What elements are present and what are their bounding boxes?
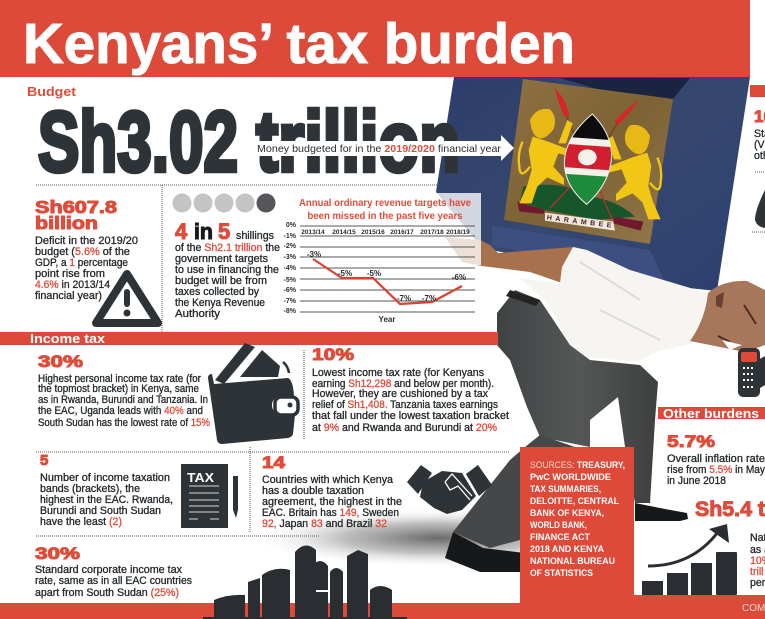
sources box: BANK OF KENYA, [530, 508, 604, 519]
shillings text: to use in financing the [175, 264, 279, 276]
coat of arms [517, 88, 661, 231]
debt text: per [750, 577, 765, 589]
panel: 14 double taxation: 14 [262, 453, 286, 472]
big figure: Sh3.02 trillion [38, 95, 460, 190]
coins [172, 194, 276, 212]
year labels: 2014/15 [332, 229, 356, 236]
panel: 5.7% inflation: rise from 5.5% in May [667, 464, 765, 476]
panel: 5 income bands: Burundi and South Sudan [40, 505, 161, 517]
debt text: trill [750, 566, 764, 578]
panel: 14 double taxation: has a double taxation [262, 485, 364, 497]
deficit figure: Sh607.8 [35, 197, 117, 217]
panel: 30% highest rate: the topmost bracket) in Kenya, same [38, 383, 199, 395]
income tax band [0, 331, 498, 346]
sources box: OF STATISTICS [530, 568, 593, 579]
shillings text: taxes collected by [175, 286, 260, 298]
panel: 4 in 5 shillings [172, 194, 280, 320]
line chart: revenue targets [284, 197, 475, 324]
icon: rising bars and arrow [642, 524, 737, 595]
panel: 30% highest rate: as in Rwanda, Burundi and Tanzania. In [38, 394, 208, 406]
panel: 10% lowest rate: relief of Sh1,408. Tanzania taxes earnings [312, 399, 498, 411]
y axis labels: -5% [284, 277, 297, 284]
chart title [299, 197, 471, 222]
front shoe [635, 503, 688, 521]
shillings text: government targets [175, 253, 268, 265]
panel: 14 double taxation: 92, Japan 83 and Brazil 32 [262, 518, 387, 530]
icon: mobile phone [738, 348, 765, 397]
panel: 5 income bands [40, 452, 173, 528]
panel: 5.7% inflation: Overall inflation rate [667, 453, 765, 465]
panel: 14 double taxation: agreement, the highest in the [262, 496, 402, 508]
panel: Sh5.4 trillion debt figure: Sh5.4 t [695, 498, 765, 521]
data labels [307, 250, 466, 303]
y axis labels: -4% [284, 265, 297, 272]
panel: 5.7% inflation: in June 2018 [667, 475, 726, 487]
y axis labels: -1% [284, 233, 297, 240]
deficit text: GDP, a 1 percentage [35, 257, 128, 269]
4 in 5 figure [175, 219, 230, 244]
y axis labels [284, 222, 297, 315]
right column: top item: (V [754, 139, 765, 151]
panel: 5.7% inflation: 5.7% [667, 432, 715, 451]
icon: tax document and pen: TAX [187, 470, 214, 485]
shillings text: the Kenya Revenue [175, 297, 265, 309]
section label: Other burdens: Other burdens [663, 406, 759, 421]
shillings text: of the Sh2.1 trillion the [175, 242, 280, 254]
arrow callout [256, 135, 514, 161]
sources box: 2018 AND KENYA [530, 544, 604, 555]
floor shadow [210, 508, 590, 568]
right column: top item [750, 85, 765, 162]
bottom right band and credit [634, 595, 765, 619]
panel: 5.7% inflation [667, 432, 765, 487]
deficit figure [35, 197, 117, 233]
shillings text: budget will be from [175, 275, 267, 287]
year labels: 2017/18 [420, 229, 444, 236]
deficit text: financial year) [35, 290, 102, 302]
big figure: Sh3.02 trillion: trillion [256, 95, 460, 190]
x axis title: Year [379, 315, 395, 324]
sources box: SOURCES: TREASURY, [530, 460, 625, 471]
data labels: -6% [452, 273, 466, 282]
panel: 10% lowest rate [312, 345, 509, 434]
year labels: 2015/16 [361, 229, 385, 236]
data labels: -3% [307, 250, 321, 259]
illustration: city skyline [203, 545, 407, 619]
rear shoe [445, 532, 525, 572]
icon: tax document and pen [181, 464, 238, 528]
debt text [750, 532, 765, 589]
sources box [520, 447, 634, 619]
data labels: -5% [367, 269, 381, 278]
icon: warning triangle [96, 274, 158, 323]
y axis labels: -7% [284, 298, 297, 305]
shillings text: Authority [175, 308, 221, 320]
deficit text: Deficit in the 2019/20 [35, 235, 138, 247]
panel: 30% highest rate [38, 352, 211, 429]
4 in 5 figure: 4 [175, 219, 188, 244]
panel: 30% highest rate: the EAC, Uganda leads with 40% and [38, 405, 203, 417]
panel: 5 income bands: Number of income taxation [40, 472, 170, 484]
data labels: -7% [397, 294, 411, 303]
man: shirt [520, 247, 707, 362]
deficit text: 4.6% in 2013/14 [35, 279, 110, 291]
panel: 10% lowest rate: However, they are cushioned by a tax [312, 388, 489, 400]
panel: 30% highest rate: 30% [38, 352, 83, 371]
chart backing panel [430, 193, 481, 265]
sources box: TAX SUMMARIES, [530, 484, 601, 495]
y axis labels: -6% [284, 287, 297, 294]
arrow callout: Money budgeted for in the 2019/2020 financial year [257, 143, 502, 155]
sources box: DELOITTE, CENTRAL [530, 496, 619, 507]
icon: dark shape at right [755, 190, 765, 228]
panel: 30% corporate tax: 30% [35, 544, 80, 563]
panel: 10% lowest rate: earning Sh12,298 and below per month). [312, 378, 494, 390]
panel: 30% corporate tax: Standard corporate income tax [35, 564, 183, 576]
sources box: PwC WORLDWIDE [530, 472, 611, 483]
illustration: couch with coat of arms [436, 77, 750, 291]
sources box: NATIONAL BUREAU [530, 556, 615, 567]
data labels: -7% [422, 294, 436, 303]
brass plate [504, 79, 673, 244]
panel: 30% highest rate: South Sudan has the lowest rate of 15% [38, 417, 211, 429]
coat of arms: HARAMBEE [546, 215, 612, 230]
chart title: been missed in the past five years [308, 210, 463, 222]
data labels: -5% [338, 269, 352, 278]
panel: 5 income bands: 5 [40, 452, 48, 469]
deficit text [35, 235, 138, 302]
icon: handshake [407, 465, 492, 514]
man: arm and hand [445, 237, 573, 283]
panel: 14 double taxation: EAC. Britain has 149, Sweden [262, 507, 399, 519]
y axis labels: -8% [284, 308, 297, 315]
icon: wallet [208, 343, 298, 444]
shillings text [175, 230, 280, 320]
data line [313, 259, 462, 304]
4 in 5 figure: 5 [218, 219, 230, 244]
panel: 10% lowest rate: that fall under the lowest taxation bracket [312, 410, 509, 422]
section label: Budget: Budget [27, 84, 77, 99]
panel: 5 income bands: highest in the EAC. Rwanda, [40, 494, 173, 506]
panel: deficit [35, 197, 158, 323]
panel: 5 income bands: have the least (2) [40, 516, 122, 528]
year labels: 2016/17 [390, 229, 414, 236]
big figure: Sh3.02 trillion: Sh3.02 [38, 95, 238, 190]
shillings text: shillings [236, 230, 274, 242]
deficit text: budget (5.6% of the [35, 246, 130, 258]
panel: 10% lowest rate: at 9% and Rwanda and Burundi at 20% [312, 422, 498, 434]
title: Kenyans’ tax burden [23, 12, 575, 76]
year labels: 2018/19 [446, 229, 470, 236]
header band [0, 0, 750, 77]
y axis labels: -2% [284, 243, 297, 250]
panel: 5 income bands: bands (brackets), the [40, 483, 140, 495]
panel: 14 double taxation [262, 453, 402, 530]
4 in 5 figure: in [194, 219, 213, 244]
man: trousers [445, 290, 688, 572]
income tax band: Income tax [30, 331, 106, 346]
panel: 30% highest rate: Highest personal income tax rate (for [38, 373, 201, 385]
bottom red band [0, 603, 520, 619]
y axis labels: 0% [286, 222, 297, 229]
deficit figure: billion [35, 213, 98, 233]
panel: 14 double taxation: Countries with which Kenya [262, 474, 393, 486]
year labels: 2013/14 [301, 229, 325, 236]
panel: 10% lowest rate: 10% [312, 345, 354, 364]
chart title: Annual ordinary revenue targets have [299, 197, 471, 209]
panel: 30% corporate tax: apart from South Sudan (25%) [35, 587, 179, 599]
panel: 30% corporate tax: rate, same as in all EAC countries [35, 575, 192, 587]
y axis labels: -3% [284, 254, 297, 261]
panel: 10% lowest rate: Lowest income tax rate (for Kenyans [312, 367, 484, 379]
sources box: FINANCE ACT [530, 532, 590, 543]
deficit text: point rise from [35, 268, 105, 280]
panel: 30% corporate tax [35, 544, 192, 599]
sources box: WORLD BANK, [530, 520, 587, 531]
year labels [301, 229, 470, 236]
man: head [690, 281, 765, 352]
